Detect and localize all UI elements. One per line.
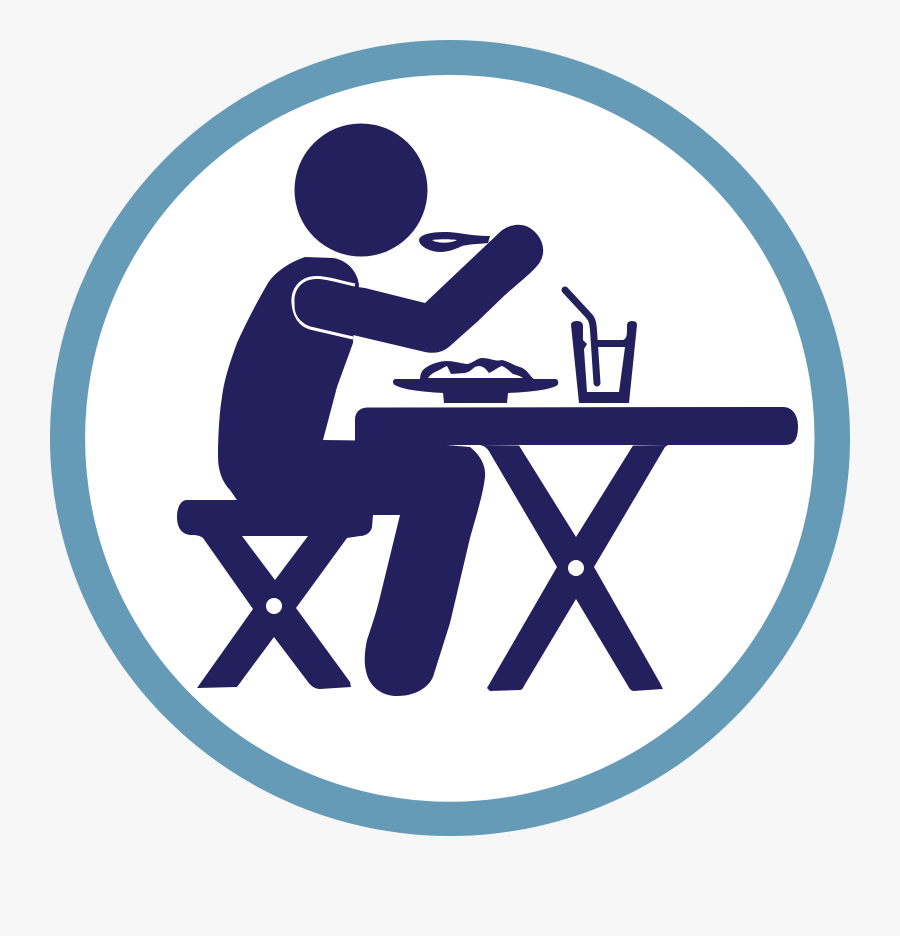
glass with straw xyxy=(565,290,637,403)
stool gap xyxy=(242,536,308,580)
person xyxy=(218,124,543,696)
plate xyxy=(393,379,558,403)
straw xyxy=(565,290,597,383)
table hinge xyxy=(568,560,584,576)
plate of food xyxy=(393,358,558,403)
glass xyxy=(571,321,637,403)
food highlight xyxy=(428,366,523,378)
stool frame xyxy=(177,500,373,689)
table xyxy=(355,407,798,691)
badge ring xyxy=(50,40,850,836)
table legs xyxy=(480,445,668,691)
stool xyxy=(177,500,373,689)
food xyxy=(420,358,537,381)
torso and leg xyxy=(218,257,485,696)
head xyxy=(294,124,428,256)
spoon highlight xyxy=(432,239,457,243)
arm outline gap xyxy=(293,277,355,338)
spoon xyxy=(419,232,490,252)
arm xyxy=(295,225,543,353)
stool hinge xyxy=(266,598,282,614)
tabletop xyxy=(355,407,798,445)
